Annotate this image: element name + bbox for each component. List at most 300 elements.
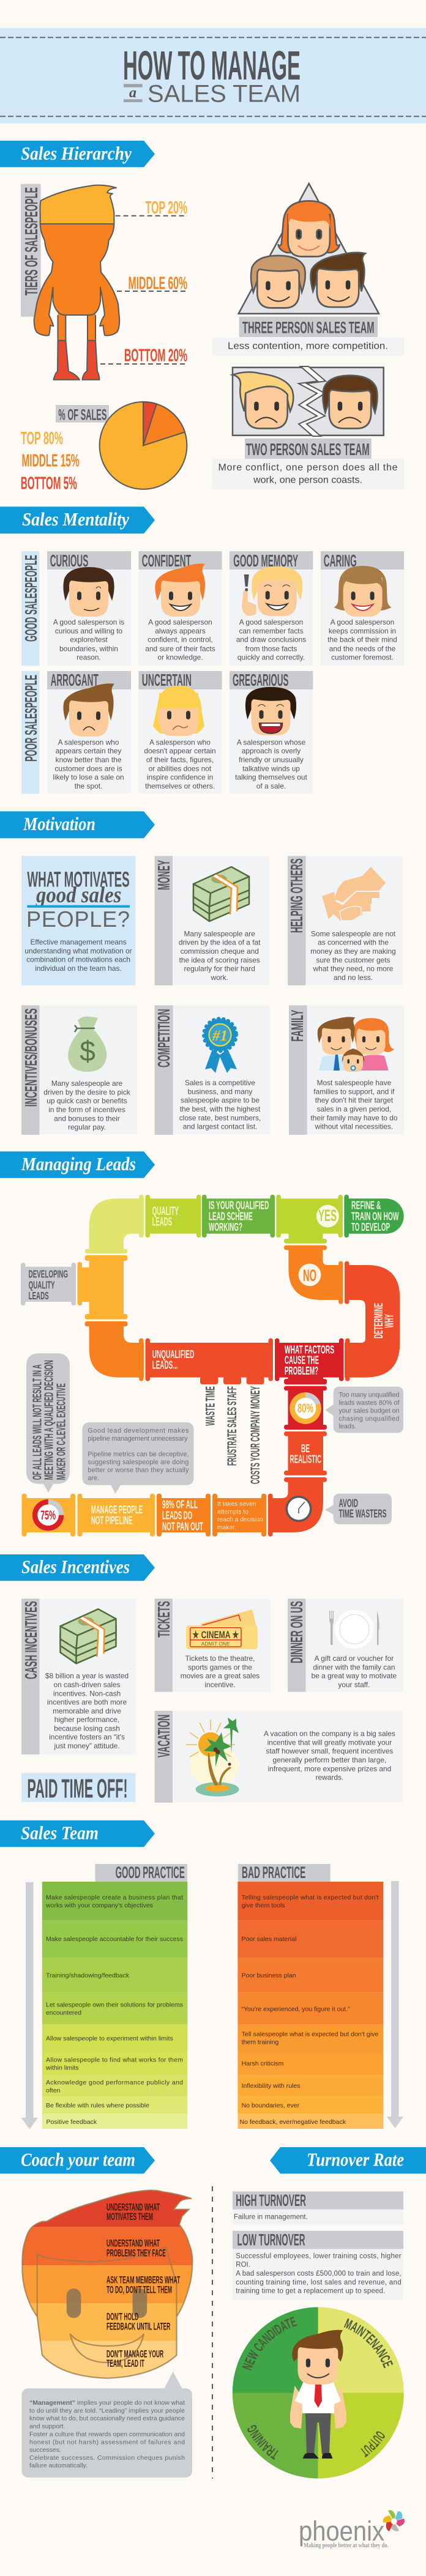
panel: what motivates: understanding what motivation or	[24, 946, 132, 955]
card: family: sales in a given period,	[317, 1105, 391, 1113]
column: good practice: Acknowledge good performance publicly and	[46, 2079, 183, 2086]
card: good memory: quickly and correctly.	[237, 653, 305, 662]
pipe: no junction	[284, 1245, 343, 1304]
pipe: yes junction: YES	[318, 1206, 337, 1225]
callout: management vs leading: successes.	[29, 2446, 61, 2454]
pipe: is your qualified lead scheme working	[202, 1195, 275, 1238]
text: three person description	[212, 338, 404, 356]
pipe: is your qualified lead scheme working: WORKING?	[209, 1220, 242, 1233]
card: arrogant: customer does are is	[54, 764, 122, 773]
column: bad practice: No boundaries, ever	[242, 2102, 300, 2109]
callout: management vs leading	[22, 2372, 192, 2478]
icon: family	[318, 1017, 394, 1072]
callout: management vs leading: know what to do, but occasionally need extra guidance	[29, 2415, 185, 2422]
card: confident	[138, 551, 222, 666]
card: arrogant: A salesperson who	[58, 738, 119, 746]
column: good practice: encountered	[46, 2009, 81, 2016]
card: curious: A good salesperson is	[53, 618, 124, 626]
icon: arrogant face	[63, 683, 114, 737]
card: tickets: sports games or the	[188, 1663, 252, 1671]
card: helping others: what they need, no more	[313, 965, 394, 973]
card: vacation: generally perform better than large,	[273, 1756, 386, 1764]
text: three person description: Less contention, more competition.	[228, 341, 388, 352]
callout: lead development: Good lead development makes	[88, 1427, 189, 1435]
card: dinner on us: dinner with the family can	[313, 1663, 395, 1671]
pipe diagram: managing leads	[21, 1195, 404, 1537]
card: money: the idea of scoring raises	[179, 956, 260, 964]
card: money	[154, 856, 269, 985]
card: dinner on us: be a great way to motivate	[312, 1672, 397, 1680]
column: good practice: Allow salespeople to experiment within limits	[46, 2035, 173, 2042]
card: caring: A good salesperson	[331, 618, 394, 626]
pipe: developing quality leads: DEVELOPING	[29, 1268, 68, 1280]
icon: money bag	[68, 1017, 106, 1072]
header band	[0, 28, 426, 124]
card: good memory: A good salesperson	[239, 618, 303, 626]
section banner: Turnover Rate	[270, 2147, 426, 2173]
vertical label: good salespeople	[21, 551, 40, 666]
callout: 80% budget: leads wastes 80% of	[339, 1400, 400, 1407]
column: bad practice: Tell salespeople what is expected but don't give	[242, 2030, 378, 2038]
panel: low turnover	[233, 2231, 403, 2299]
chart: coaching head layers	[18, 2184, 196, 2381]
section banner: Sales Hierarchy	[0, 141, 155, 167]
panel: what motivates: PEOPLE?	[26, 907, 130, 932]
callout: avoid time wasters: TIME WASTERS	[339, 1507, 387, 1520]
column: good practice: Make salespeople create a business plan that	[46, 1894, 183, 1901]
section banner: Sales Mentality	[0, 507, 155, 533]
card: family: Most salespeople have	[317, 1078, 392, 1087]
callout: avoid time wasters	[325, 1494, 392, 1524]
card: confident: CONFIDENT	[142, 551, 191, 570]
icon: money bag: $	[80, 1035, 95, 1067]
card: competition: close rate, best numbers,	[179, 1113, 261, 1122]
pipe: unqualified leads: LEADS...	[152, 1358, 178, 1371]
card: incentives/bonuses: up quick cash or benefits	[47, 1097, 127, 1105]
callout: 80% budget: your sales budget on	[339, 1407, 399, 1414]
panel: high turnover: Failure in management.	[234, 2214, 308, 2221]
pipe: determine why: DETERMINE	[372, 1303, 386, 1338]
panel: low turnover: Successful employees, lower training costs, higher	[236, 2253, 402, 2260]
icon: caring face	[334, 566, 392, 617]
label: % of sales	[56, 405, 109, 424]
legend: sales shares: TOP 80%	[21, 429, 63, 448]
section banner: Sales Incentives: Sales Incentives	[21, 1556, 130, 1578]
arrow: good practice scale	[21, 1882, 38, 2129]
card: incentives/bonuses	[21, 1005, 137, 1135]
text: two person description: work, one person coasts.	[253, 475, 362, 485]
card: caring: the back of their mind	[327, 636, 397, 644]
pipe: manage people not pipeline: NOT PIPELINE	[91, 1514, 133, 1527]
card: arrogant: appears certain they	[56, 747, 121, 755]
card: incentives/bonuses: and bonuses to their	[54, 1114, 120, 1123]
pipe: developing quality leads: QUALITY	[29, 1279, 55, 1291]
card: cash incentives	[21, 1598, 136, 1754]
column: good practice: Allow salespeople to find what works for them	[46, 2056, 183, 2063]
section banner: Motivation	[0, 811, 155, 838]
column: bad practice	[237, 1863, 383, 2129]
label: three person sales team	[239, 317, 378, 337]
card: gregarious: friendly or unusually	[239, 755, 304, 764]
chart: coaching head layers: UNDERSTAND WHAT	[106, 2238, 160, 2249]
card: vacation: rewards.	[316, 1773, 343, 1782]
label: % of sales: % OF SALES	[58, 407, 106, 424]
section banner: Managing Leads: Managing Leads	[21, 1153, 136, 1175]
column: bad practice: BAD PRACTICE	[242, 1863, 305, 1882]
card: good memory: GOOD MEMORY	[233, 551, 298, 570]
card: cash incentives: incentive fosters an “it's	[49, 1733, 125, 1742]
card: family: FAMILY	[288, 1010, 307, 1042]
callout: 80% budget: leads.	[339, 1423, 356, 1430]
section banner: Sales Team	[0, 1821, 155, 1847]
icon: cash stack	[193, 867, 249, 921]
card: money: commission cheque and	[181, 947, 259, 956]
section banner: Sales Team: Sales Team	[21, 1822, 99, 1844]
chart: coaching head layers: DON'T MANAGE YOUR	[106, 2348, 163, 2359]
card: vacation: incentive that will greatly motivate your	[267, 1738, 392, 1746]
card: confident: confident, in control,	[148, 636, 213, 644]
card: good memory: can remember facts	[239, 626, 304, 635]
callout: 80% budget: chasing unqualified	[339, 1415, 399, 1422]
card: curious: reason.	[77, 653, 101, 662]
pipe: quality leads: QUALITY	[152, 1205, 179, 1218]
pipe: quality leads: LEADS	[152, 1216, 172, 1228]
card: confident: A good salesperson	[148, 618, 212, 626]
card: good memory: and draw conclusions	[236, 636, 306, 644]
pipe: orange elbow	[84, 1321, 144, 1381]
pipe: is your qualified lead scheme working: LEAD SCHEME	[209, 1209, 253, 1222]
card: tickets: movies are a great sales	[181, 1672, 260, 1680]
legend: sales shares: MIDDLE 15%	[22, 451, 80, 471]
callout: management vs leading: Celebrate successes. Commission cheques punish	[29, 2454, 185, 2462]
pipe: 98% of all leads	[157, 1494, 211, 1537]
icon: curious face	[63, 567, 114, 617]
card: helping others: and no less.	[334, 973, 373, 982]
column: bad practice: Harsh criticism	[242, 2060, 284, 2067]
chart: coaching head layers: FEEDBACK UNTIL LATER	[106, 2321, 170, 2332]
logo: phoenix: Making people better at what they do.	[304, 2542, 389, 2549]
callout: 80% budget: Too many unqualified	[339, 1392, 399, 1399]
title	[123, 43, 301, 108]
icon: cinema tickets: ★ CINEMA ★	[192, 1629, 239, 1641]
callout: management vs leading: and support.	[29, 2423, 65, 2430]
card: gregarious	[230, 670, 313, 793]
pipe: refine and train: REFINE &	[351, 1199, 381, 1212]
card: caring	[321, 551, 404, 666]
card: vacation: VACATION	[154, 1715, 173, 1758]
card: incentives/bonuses: INCENTIVES/BONUSES	[21, 1008, 40, 1107]
card: cash incentives: incentives. Non-cash	[53, 1689, 121, 1698]
card: competition: and largest contact list.	[183, 1123, 257, 1131]
card: cash incentives: because losing cash	[54, 1724, 120, 1732]
arrow: bad practice scale	[387, 1881, 403, 2128]
card: uncertain: A salesperson who	[149, 738, 211, 746]
pipe diagram: managing leads: COSTS YOUR COMPANY MONEY	[248, 1386, 263, 1484]
card: family: without vital necessities.	[315, 1123, 393, 1131]
pipe: manage people not pipeline: MANAGE PEOPLE	[91, 1503, 143, 1516]
card: dinner on us: A gift card or voucher for	[315, 1654, 394, 1663]
card: caring: customer foremost.	[331, 653, 394, 662]
panel: low turnover: counting training time, lost sales and revenue, and	[236, 2279, 402, 2286]
panel: low turnover: ROI.	[236, 2262, 250, 2269]
panel: what motivates: individual on the team has.	[35, 964, 122, 973]
pie chart: % of sales	[100, 402, 187, 489]
column: good practice: GOOD PRACTICE	[116, 1863, 185, 1882]
text: GOOD SALESPEOPLE	[21, 555, 40, 642]
panel: low turnover: training time to get a replacement up to speed.	[236, 2288, 385, 2295]
card: tickets: TICKETS	[154, 1601, 173, 1638]
column: bad practice: them training	[242, 2038, 279, 2046]
card: vacation: staff however small, frequent incentives	[266, 1747, 393, 1756]
vertical label: tiers of salespeople: TIERS OF SALESPEOPLE	[22, 187, 42, 295]
card: competition: business, and many	[188, 1087, 252, 1096]
card: helping others: as concerned with the	[318, 938, 389, 947]
column: bad practice: Poor business plan	[242, 1972, 296, 1979]
card: cash incentives: incentives are both more	[47, 1698, 127, 1707]
card: curious: boundaries, within	[59, 644, 118, 653]
chart: coaching head layers: UNDERSTAND WHAT	[106, 2202, 160, 2213]
pipe: 75% gauge: 75%	[40, 1509, 56, 1523]
section banner: Turnover Rate: Turnover Rate	[307, 2149, 404, 2170]
column: good practice: works with your company's objectives	[45, 1902, 153, 1909]
callout: avoid time wasters: AVOID	[339, 1496, 358, 1509]
pipe: seven attempts	[212, 1494, 266, 1537]
pipe: what factors cause the problem	[275, 1338, 344, 1384]
callout: of all leads: MEETING WITH A QUALIFIED DECISION	[43, 1360, 56, 1480]
card: gregarious: approach is overly	[242, 747, 301, 755]
card: caring: keeps commission in	[329, 626, 396, 635]
icon: good memory face	[242, 566, 302, 616]
label: top 20%	[116, 198, 187, 218]
card: uncertain: or abilities does not	[149, 764, 212, 773]
chart: turnover wheel: NEW CANDIDATE	[242, 2316, 297, 2370]
title: SALES TEAM	[148, 81, 301, 108]
panel: high turnover: HIGH TURNOVER	[236, 2191, 306, 2210]
pipe: seven attempts: maker.	[217, 1524, 236, 1531]
card: money: MONEY	[154, 860, 173, 890]
card: arrogant: know better than the	[56, 755, 122, 764]
card: vacation: A vacation on the company is a big sales	[264, 1729, 395, 1738]
card: caring: CARING	[324, 551, 357, 570]
section banner: Coach your team: Coach your team	[21, 2149, 135, 2170]
card: helping others: sure the customer gets	[316, 956, 390, 964]
panel: low turnover: A bad salesperson costs £500,000 to train and lose,	[236, 2270, 402, 2277]
text: two person description	[212, 459, 404, 489]
card: arrogant: likely to lose a sale on	[53, 773, 124, 782]
pipe: 80% gauge	[284, 1386, 327, 1430]
figure: tiers character	[34, 185, 119, 380]
callout: lead development: better or worse than they actually	[88, 1466, 189, 1474]
pipe: no junction: NO	[303, 1266, 316, 1285]
card: uncertain: inspire confidence in	[147, 773, 213, 782]
pipe: 98% of all leads: LEADS DO	[162, 1509, 192, 1521]
card: dinner on us	[287, 1598, 403, 1692]
column: good practice: often	[46, 2087, 61, 2094]
column: good practice: Be flexible with rules where possible	[46, 2102, 149, 2109]
pipe diagram: managing leads: WASTE TIME	[204, 1386, 218, 1426]
column: bad practice: Inflexibility with rules	[242, 2082, 300, 2090]
callout: 80% budget	[325, 1387, 403, 1433]
card: cash incentives: memorable and drive	[53, 1707, 121, 1715]
card: good memory: from those facts	[245, 644, 297, 653]
pipe: seven attempts: attempts to	[217, 1509, 248, 1515]
column: good practice: Make salespeople accountable for their success	[46, 1936, 183, 1943]
card: dinner on us: DINNER ON US	[287, 1601, 306, 1663]
card: incentives/bonuses: Many salespeople are	[51, 1079, 123, 1088]
card: curious: explore/test	[70, 636, 108, 644]
card: cash incentives: CASH INCENTIVES	[21, 1601, 40, 1679]
chart: coaching head layers: DON'T HOLD	[106, 2311, 138, 2322]
card: cash incentives: higher performance,	[54, 1715, 119, 1724]
icon: #1 rosette	[204, 1019, 237, 1073]
column: bad practice: Poor sales material	[242, 1936, 296, 1943]
icon: cinema tickets	[186, 1609, 258, 1649]
card: uncertain: themselves or others.	[145, 782, 215, 790]
legend: sales shares: BOTTOM 5%	[21, 473, 77, 493]
callout: of all leads: OF ALL LEADS WILL NOT RESULT IN A	[31, 1364, 44, 1480]
card: money: Many salespeople are	[184, 929, 255, 938]
pipe: what factors cause the problem: CAUSE THE	[285, 1354, 319, 1367]
icon: phoenix pinwheel	[383, 2510, 405, 2531]
card: gregarious: talkative winds up	[242, 764, 300, 773]
pipe: determine why	[345, 1261, 400, 1381]
callout: of all leads	[26, 1353, 70, 1493]
card: money: work.	[210, 973, 228, 982]
pipe: yellow junction	[77, 1255, 127, 1320]
card: cash incentives: just money” attitude.	[53, 1742, 120, 1750]
chart: coaching head layers: MOTIVATES THEM	[106, 2211, 153, 2222]
column: good practice: Positive feedback	[47, 2118, 97, 2126]
callout: lead development	[82, 1422, 193, 1494]
icon: salesperson figure	[290, 2330, 346, 2459]
chart: coaching head layers: PROBLEMS THEY FACE	[106, 2248, 166, 2259]
card: uncertain: doesn't appear certain	[144, 747, 216, 755]
panel: high turnover	[233, 2191, 403, 2224]
callout: lead development: suggesting salespeople are doing	[88, 1459, 189, 1466]
card: arrogant: the spot.	[75, 782, 102, 790]
card: money: regularly for their hard	[184, 965, 255, 973]
column: bad practice: Telling salespeople what is expected but don't	[242, 1894, 379, 1901]
pipe: be realistic: REALISTIC	[290, 1453, 321, 1466]
section banner: Sales Mentality: Sales Mentality	[22, 508, 129, 530]
card: incentives/bonuses: regular pay.	[68, 1123, 106, 1132]
label: two person sales team	[245, 439, 372, 459]
column: good practice	[42, 1863, 187, 2129]
panel: what motivates: WHAT MOTIVATES	[27, 867, 130, 891]
card: uncertain: of their facts, figures,	[146, 755, 214, 764]
card: gregarious: GREGARIOUS	[233, 670, 288, 689]
card: family: they don't hit their target	[315, 1096, 394, 1105]
pipe: light elbow	[84, 1195, 144, 1253]
callout: management vs leading: to do until they are told. “Leading” implies your people	[29, 2407, 185, 2415]
panel: what motivates: Effective management means	[30, 938, 127, 946]
icon: three person team	[239, 184, 379, 314]
icon: palm island	[186, 1718, 239, 1797]
pipe: developing quality leads	[21, 1263, 76, 1305]
callout: management vs leading: “Management” implies your people do not know what	[29, 2399, 185, 2407]
pipe: quality leads	[146, 1195, 201, 1238]
pipe: developing quality leads: LEADS	[29, 1290, 49, 1302]
icon: confident face	[155, 563, 205, 617]
card: arrogant	[47, 670, 131, 793]
callout: management vs leading: failure automatically.	[29, 2462, 88, 2470]
card: cash incentives: $8 billion a year is wasted	[45, 1672, 129, 1680]
card: gregarious: A salesperson whose	[237, 738, 306, 746]
pipe: refine and train: TO DEVELOP	[351, 1220, 390, 1233]
icon: cinema tickets: ADMIT ONE	[201, 1641, 230, 1647]
section banner: Sales Hierarchy: Sales Hierarchy	[21, 143, 132, 164]
card: competition	[154, 1005, 270, 1135]
card: uncertain	[138, 670, 222, 793]
icon: gregarious face	[245, 687, 296, 735]
pipe: 98% of all leads: NOT PAN OUT	[162, 1520, 203, 1533]
card: family	[288, 1005, 404, 1135]
card: helping others: HELPING OTHERS	[287, 858, 306, 933]
card: curious	[47, 551, 131, 666]
pipe: seven attempts: It takes seven	[217, 1501, 256, 1507]
section banner: Motivation: Motivation	[23, 813, 95, 834]
pipe diagram: managing leads: FRUSTRATE SALES STAFF	[225, 1386, 239, 1466]
chart: coaching head layers: TO DO, DON'T TELL THEM	[106, 2285, 172, 2296]
icon: two person team	[233, 366, 384, 436]
column: bad practice: “You're experienced, you figure it out.”	[242, 2005, 350, 2013]
card: incentives/bonuses: in the form of incentives	[48, 1105, 125, 1114]
card: tickets: Tickets to the theatre,	[185, 1654, 255, 1663]
card: confident: always appears	[155, 626, 206, 635]
card: family: their family may have to do	[310, 1113, 398, 1122]
chart: turnover wheel: OUTPUT	[361, 2431, 385, 2457]
text: POOR SALESPEOPLE	[21, 675, 40, 762]
callout: lead development: pipeline management unnecessary	[88, 1435, 188, 1442]
icon: #1 rosette: #1	[212, 1028, 228, 1044]
section banner: Sales Incentives	[0, 1554, 155, 1581]
pipe: refine and train	[344, 1195, 404, 1238]
panel: what motivates: combination of motivations each	[26, 956, 130, 964]
chart: turnover wheel: TRAINING	[247, 2425, 278, 2460]
panel: low turnover: LOW TURNOVER	[237, 2231, 305, 2249]
column: good practice: Let salespeople own their solutions for problems	[46, 2001, 183, 2008]
callout: of all leads: MAKER OR C-LEVEL EXECUTIVE	[55, 1383, 69, 1480]
pipe: be realistic: BE	[301, 1442, 310, 1455]
card: gregarious: talking themselves out	[235, 773, 308, 782]
panel: what motivates	[21, 856, 136, 985]
pipe: 75% gauge	[22, 1494, 75, 1537]
card: helping others: Some salespeople are not	[311, 929, 396, 938]
callout: lead development: Pipeline metrics can be deceptive,	[88, 1451, 189, 1458]
pipe: 98% of all leads: 98% OF ALL	[162, 1498, 198, 1511]
column: good practice: within limits	[45, 2064, 79, 2071]
vertical label: tiers of salespeople	[21, 184, 42, 317]
label: bottom 20%: BOTTOM 20%	[124, 346, 187, 366]
card: arrogant: ARROGANT	[51, 670, 99, 689]
card: tickets	[154, 1598, 271, 1692]
card: gregarious: of a sale.	[256, 782, 286, 790]
pipe: manage people not pipeline	[77, 1494, 155, 1537]
pipe: seven attempts: reach a decision	[217, 1516, 263, 1523]
card: family: families to support, and if	[313, 1087, 395, 1096]
chart: coaching head layers: ASK TEAM MEMBERS WHAT	[106, 2275, 180, 2286]
label: middle 60%	[117, 274, 187, 294]
card: confident: or knowledge.	[157, 653, 203, 662]
pipe: yes junction	[276, 1195, 343, 1244]
card: money: driven by the idea of a fat	[179, 938, 261, 947]
card: dinner on us: your staff.	[338, 1680, 370, 1689]
card: uncertain: UNCERTAIN	[142, 670, 192, 689]
pipe: clock elbow	[268, 1477, 327, 1537]
title: a	[129, 85, 136, 101]
column: good practice: Training/shadowing/feedback	[46, 1972, 130, 1979]
pipe: is your qualified lead scheme working: IS YOUR QUALIFIED	[209, 1199, 269, 1212]
